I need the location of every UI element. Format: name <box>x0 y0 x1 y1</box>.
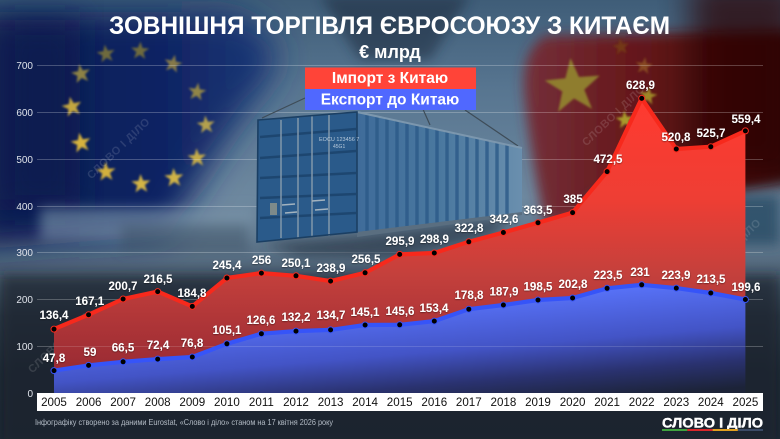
y axis labels: 600 <box>16 108 33 119</box>
export value labels: 223,5 <box>593 269 623 282</box>
x axis band with years: 2016 <box>421 396 447 409</box>
watermarks: СЛОВО І ДІЛО <box>85 116 153 182</box>
watermarks <box>26 83 764 376</box>
export value labels: 132,2 <box>281 311 311 324</box>
export value labels: 202,8 <box>558 278 588 291</box>
export value labels: 187,9 <box>489 286 519 298</box>
watermarks: СЛОВО І ДІЛО <box>446 303 514 369</box>
export value labels: 231 <box>630 266 650 279</box>
title: ЗОВНІШНЯ ТОРГІВЛЯ ЄВРОСОЮЗУ З КИТАЄМ <box>109 12 670 40</box>
area: export to China <box>54 285 745 393</box>
import value labels: 342,6 <box>489 213 519 226</box>
x axis band with years: 2010 <box>214 396 240 409</box>
x axis band with years: 2015 <box>387 396 413 409</box>
top crane shadow <box>320 0 470 60</box>
x axis band with years: 2006 <box>76 396 101 409</box>
import value labels: 385 <box>563 193 583 206</box>
x axis band with years: 2011 <box>249 396 274 409</box>
line: import from China <box>51 95 748 332</box>
x axis band with years: 2005 <box>41 396 67 409</box>
flag of China <box>524 0 780 225</box>
export value labels: 105,1 <box>212 324 242 337</box>
export value labels: 59 <box>84 346 97 359</box>
y axis labels: 200 <box>16 295 33 306</box>
x axis band with years: 2012 <box>283 396 309 409</box>
export value labels: 145,1 <box>350 306 380 319</box>
export value labels: 223,9 <box>661 269 691 282</box>
x axis band with years: 2017 <box>456 396 482 409</box>
y axis labels: 0 <box>27 389 33 400</box>
import value labels: 256,5 <box>351 253 381 266</box>
export value labels: 153,4 <box>419 302 449 315</box>
import value labels: 200,7 <box>108 280 138 293</box>
import value labels: 184,8 <box>177 287 207 300</box>
y axis labels: 400 <box>16 202 33 213</box>
crane cables <box>262 98 518 146</box>
import value labels: 322,8 <box>454 222 484 235</box>
import value labels: 216,5 <box>143 273 173 286</box>
import value labels: 525,7 <box>696 127 726 140</box>
grid lines <box>37 66 763 346</box>
import value labels: 298,9 <box>420 233 450 246</box>
watermarks: СЛОВО І ДІЛО <box>580 83 648 149</box>
import value labels: 238,9 <box>316 262 346 275</box>
blurred port at the bottom <box>0 195 780 439</box>
export value labels: 76,8 <box>181 337 204 350</box>
export value labels: 145,6 <box>385 305 415 318</box>
legend: Імпорт з Китаю <box>332 70 448 87</box>
container shadow <box>262 216 515 258</box>
y axis labels: 100 <box>16 342 33 353</box>
area: import from China <box>54 98 745 371</box>
import value labels: 363,5 <box>523 204 553 217</box>
x axis band with years: 2023 <box>663 396 689 409</box>
export value labels <box>43 266 761 365</box>
flag of the EU <box>0 12 275 250</box>
x axis band with years: 2013 <box>318 396 343 409</box>
import value labels: 256 <box>252 254 272 267</box>
import value labels <box>39 79 761 322</box>
icon: shipping container: EOCU 123456 7 <box>319 137 359 143</box>
import value labels: 250,1 <box>281 257 311 270</box>
import value labels: 136,4 <box>39 309 69 322</box>
export value labels: 213,5 <box>696 273 726 286</box>
export value labels: 72,4 <box>147 339 170 352</box>
y axis labels: 500 <box>16 155 33 166</box>
x axis band with years: 2007 <box>110 396 136 409</box>
legend: Експорт до Китаю <box>321 92 459 108</box>
x axis band with years: 2024 <box>698 396 724 409</box>
import value labels: 472,5 <box>593 153 623 166</box>
watermarks: СЛОВО І ДІЛО <box>696 217 764 283</box>
x axis band with years: 2022 <box>629 396 655 409</box>
export value labels: 199,6 <box>731 281 761 294</box>
x axis band with years: 2008 <box>145 396 171 409</box>
import value labels: 520,8 <box>661 131 691 144</box>
y axis labels <box>16 61 33 400</box>
x axis band with years: 2021 <box>594 396 620 409</box>
x axis band with years: 2009 <box>179 396 205 409</box>
x axis band with years: 2019 <box>525 396 551 409</box>
export value labels: 134,7 <box>316 309 346 322</box>
y axis labels: 300 <box>16 248 33 259</box>
export value labels: 47,8 <box>43 352 66 365</box>
import value labels: 245,4 <box>212 259 242 272</box>
import value labels: 295,9 <box>385 235 415 248</box>
import value labels: 559,4 <box>731 113 761 126</box>
source note: Інфографіку створено за даними Eurostat, «Слово і діло» станом на 17 квітня 2026 року <box>35 418 334 427</box>
logo: СЛОВО І ДІЛО <box>662 414 763 430</box>
y axis labels: 700 <box>16 61 33 72</box>
line: export to China <box>51 282 748 374</box>
export value labels: 66,5 <box>112 342 135 354</box>
export value labels: 178,8 <box>454 289 484 302</box>
import value labels: 628,9 <box>626 79 656 92</box>
icon: shipping container: 45G1 <box>333 144 345 150</box>
x axis band with years: 2025 <box>733 396 758 409</box>
export value labels: 198,5 <box>523 280 553 294</box>
legend <box>305 68 476 110</box>
x axis band with years: 2014 <box>352 396 379 409</box>
export value labels: 126,6 <box>246 314 276 327</box>
container side <box>357 112 522 232</box>
x axis band with years <box>37 393 763 411</box>
x axis band with years: 2018 <box>491 396 516 409</box>
icon: shipping container <box>257 98 522 258</box>
x axis band with years: 2020 <box>560 396 585 409</box>
import value labels: 167,1 <box>75 295 105 308</box>
container doors <box>257 112 357 242</box>
watermarks: СЛОВО І ДІЛО <box>26 310 94 376</box>
subtitle: € млрд <box>359 42 421 62</box>
